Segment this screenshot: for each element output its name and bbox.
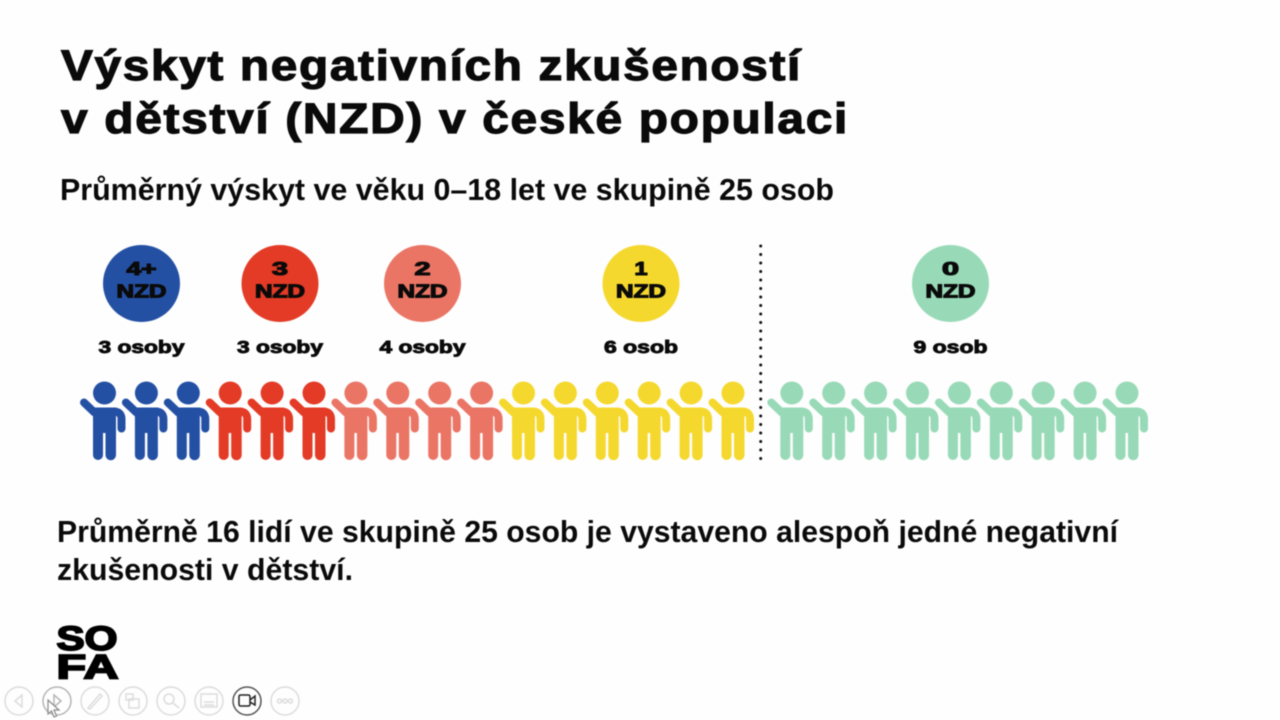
conclusion text: zkušenosti v dětství. [57, 552, 353, 587]
logo: SOFA: SO [56, 620, 118, 658]
people: 0 NZD [771, 382, 1144, 460]
presentation toolbar [5, 687, 299, 717]
subtitle: Průměrný výskyt ve věku 0–18 let ve skupině 25 osob [60, 172, 834, 207]
icon: subtitles [195, 687, 223, 715]
category: 3 NZD: 3 [272, 259, 288, 279]
title [61, 42, 849, 143]
conclusion text: Průměrně 16 lidí ve skupině 25 osob je vystaveno alespoň jedné negativní [57, 514, 1119, 549]
icon: pen [81, 687, 109, 715]
category: 4+ NZD: NZD [116, 282, 166, 302]
category: 1 NZD: 1 [634, 259, 648, 279]
icon: more [271, 687, 299, 715]
category: 4+ NZD [98, 245, 185, 357]
category: 2 NZD [380, 245, 466, 357]
category: 3 NZD: 3 osoby [237, 337, 323, 357]
category: 2 NZD: 2 [414, 259, 430, 279]
logo: SOFA [56, 620, 118, 686]
icon: mouse cursor [48, 700, 59, 717]
category: 1 NZD: 6 osob [604, 337, 678, 357]
category: 1 NZD [602, 245, 680, 357]
category: 1 NZD: NZD [616, 282, 666, 302]
divider: dotted line [759, 246, 762, 461]
people: 3 NZD [210, 382, 331, 460]
title: v dětství (NZD) v české populaci [61, 95, 849, 143]
category: 4+ NZD: 4+ [126, 259, 156, 279]
category: 2 NZD: NZD [398, 282, 448, 302]
title: Výskyt negativních zkušeností [61, 42, 803, 90]
logo: SOFA: FA [56, 648, 118, 686]
icon: video camera [233, 687, 261, 715]
people: 1 NZD [503, 382, 750, 460]
category: 2 NZD: 4 osoby [380, 337, 466, 357]
category: 0 NZD: NZD [926, 282, 976, 302]
category: 0 NZD: 9 osob [914, 337, 988, 357]
icon: next [43, 687, 71, 715]
icon: previous [5, 687, 33, 715]
conclusion text [57, 514, 1119, 587]
category: 3 NZD: NZD [255, 282, 305, 302]
category: 0 NZD [912, 245, 989, 357]
icon: zoom [157, 687, 185, 715]
people: 4+ NZD [84, 382, 205, 460]
people: 2 NZD [335, 382, 499, 460]
icon: slides [119, 687, 147, 715]
category: 0 NZD: 0 [942, 259, 959, 279]
category: 3 NZD [237, 245, 323, 357]
category: 4+ NZD: 3 osoby [98, 337, 185, 357]
